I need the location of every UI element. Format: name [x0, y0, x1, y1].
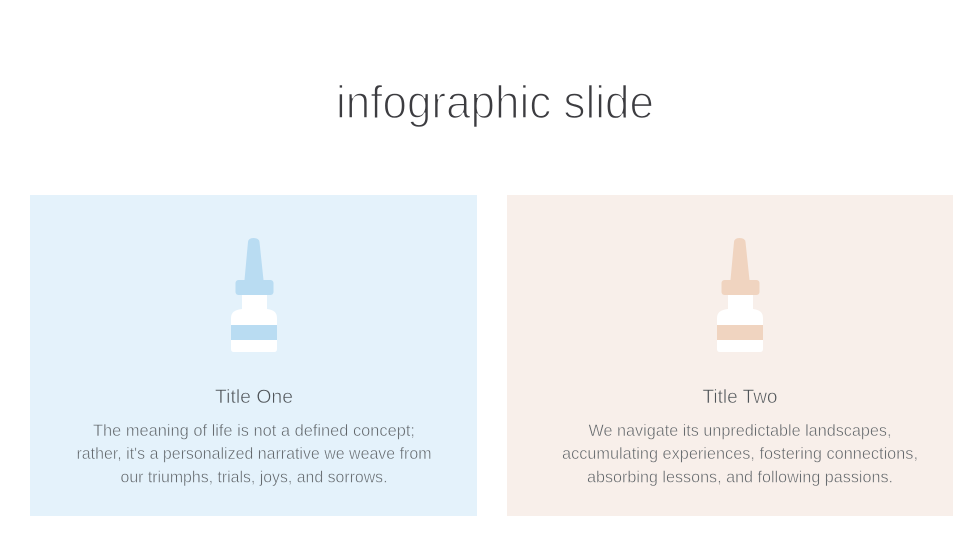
icon: blue dropper bottle: [231, 238, 277, 352]
text block: title two description: accumulating experiences, fostering connections,: [562, 445, 918, 463]
panel: title two: [507, 195, 953, 516]
text block: title one description: The meaning of life is not a defined concept;: [93, 422, 415, 440]
heading: title one: Title One: [215, 387, 293, 408]
text block: title two description: absorbing lessons, and following passions.: [587, 468, 893, 486]
text block: title two description: We navigate its unpredictable landscapes,: [588, 422, 892, 440]
text block: title one description: [76, 422, 432, 486]
heading: title two: Title Two: [702, 387, 778, 408]
text block: title one description: our triumphs, trials, joys, and sorrows.: [120, 468, 388, 486]
icon: peach dropper bottle: [717, 238, 763, 352]
text block: title two description: [562, 422, 918, 486]
title: infographic slide: [336, 76, 654, 128]
text block: title one description: rather, it's a personalized narrative we weave from: [76, 445, 432, 463]
panel: title one: [30, 195, 477, 516]
